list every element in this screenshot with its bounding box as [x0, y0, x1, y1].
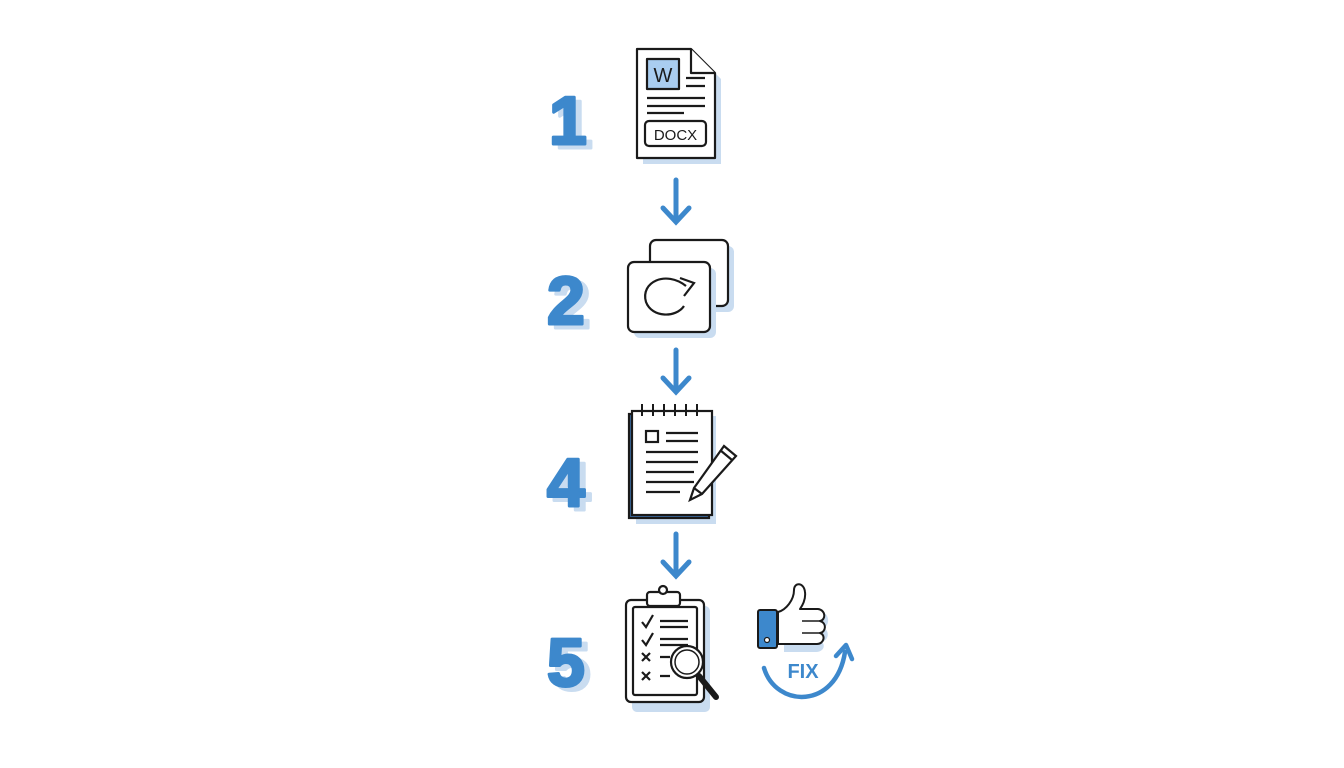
- icon: clipboard with checklist: [626, 586, 716, 712]
- icon: thumbs up with fix loop: [758, 584, 852, 697]
- step 1 number: 1: [555, 87, 593, 163]
- step 4 number: 4: [547, 445, 585, 521]
- step 1 number: 1: [549, 83, 587, 159]
- step 4 number: 4: [553, 449, 591, 525]
- icon: thumbs up with fix loop: FIX: [787, 661, 819, 683]
- icon: docx file: DOCX: [654, 127, 697, 144]
- arrow 1: [663, 180, 689, 222]
- step 2 number: 2: [547, 263, 585, 339]
- step 2 number: 2: [553, 267, 591, 343]
- icon: notepad with pencil: [629, 404, 736, 524]
- step 5 number: 5: [547, 625, 585, 701]
- step 5 number: 5: [553, 629, 591, 705]
- icon: convert cards: [628, 240, 734, 338]
- icon: docx file: [637, 49, 721, 164]
- arrow 2: [663, 350, 689, 392]
- arrow 3: [663, 534, 689, 576]
- icon: docx file: W: [654, 65, 673, 87]
